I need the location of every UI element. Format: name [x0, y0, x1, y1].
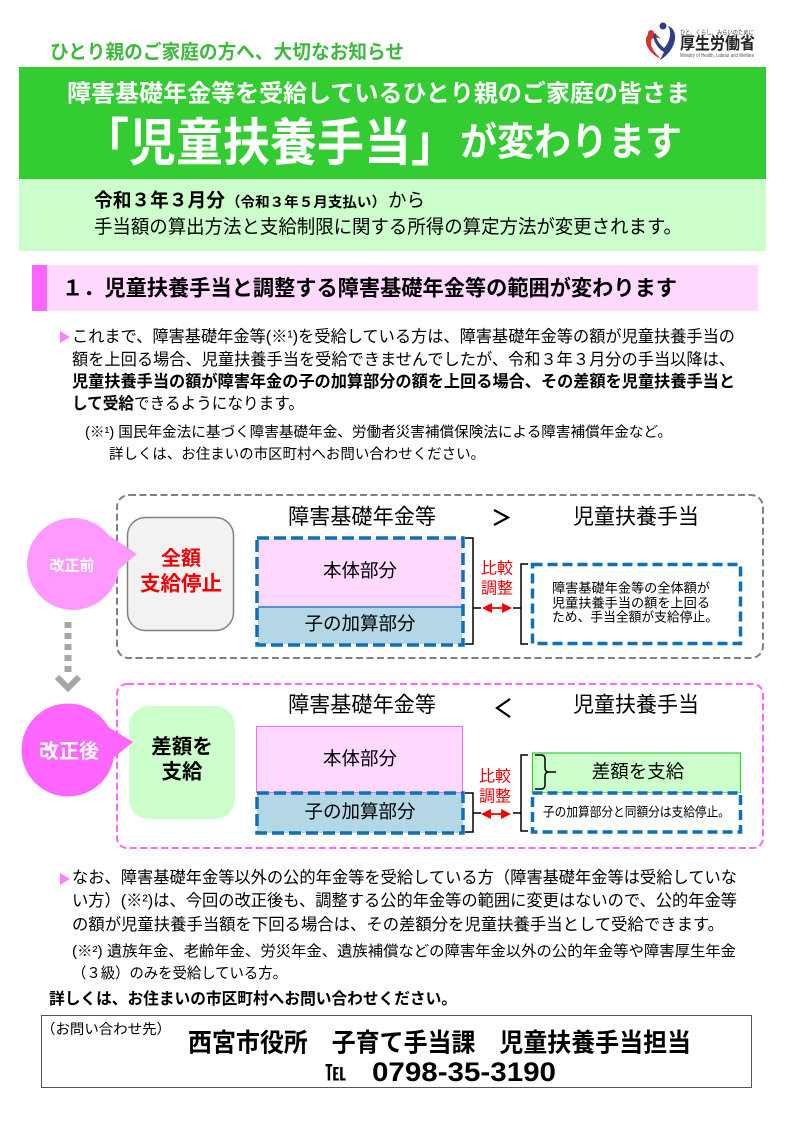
after pension bar — [256, 726, 463, 833]
intro paragraph: して受給できるようになります。 — [72, 394, 304, 413]
before allowance box: 障害基礎年金等の全体額が — [552, 580, 710, 596]
arrow: before to after — [57, 622, 79, 688]
logo: Ministry of Health, Labour and Welfare: Ministry of Health, Labour and Welfare — [680, 53, 754, 59]
before result box: 全額 — [161, 547, 201, 570]
after result box: 差額を — [151, 736, 213, 758]
before badge: 改正前 — [49, 556, 95, 574]
after pension bar: 本体部分 — [323, 748, 397, 769]
after compare label: 調整 — [479, 788, 511, 806]
inquiry note: 詳しくは、お住まいの市区町村へお問い合わせください。 — [49, 989, 457, 1008]
after bracket left — [465, 793, 481, 832]
after badge: 改正後 — [39, 740, 99, 763]
after compare label: 比較 — [479, 768, 511, 786]
footnote 2 — [72, 942, 736, 982]
after stopped box: 子の加算部分と同額分は支給停止。 — [543, 804, 730, 820]
before result box — [128, 518, 234, 630]
before badge — [27, 518, 137, 610]
contact office: 西宮市役所 子育て手当課 児童扶養手当担当 — [188, 1030, 691, 1058]
before bracket right — [513, 564, 528, 644]
payment date: （令和３年５月支払い） — [226, 194, 386, 210]
footnote 2: (※²) 遺族年金、老齢年金、労災年金、遺族補償などの障害年金以外の公的年金等や障害厚生年金 — [72, 942, 736, 960]
before bracket left — [465, 538, 481, 644]
before allowance box: ため、手当全額が支給停止。 — [552, 610, 718, 624]
footnote 1: (※¹) 国民年金法に基づく障害基礎年金、労働者災害補償保険法による障害補償年金など。 — [85, 424, 672, 441]
after badge — [22, 704, 133, 796]
before compare arrow — [484, 604, 510, 612]
after left heading: 障害基礎年金等 — [288, 693, 436, 717]
before left heading: 障害基礎年金等 — [288, 505, 436, 529]
before pension bar: 本体部分 — [323, 560, 397, 581]
second paragraph: なお、障害基礎年金等以外の公的年金等を受給している方（障害基礎年金等は受給していな — [72, 868, 737, 887]
intro paragraph: 額を上回る場合、児童扶養手当を受給できませんでしたが、令和３年３月分の手当以降は、 — [72, 350, 735, 369]
footnote 1: 詳しくは、お住まいの市区町村へお問い合わせください。 — [109, 446, 485, 463]
before allowance box — [532, 564, 740, 644]
second paragraph: い方）(※²)は、今回の改正後も、調整する公的年金等の範囲に変更はないので、公的年金等 — [72, 891, 737, 910]
logo: Ministry of Health, Labour and Welfare: 厚生労働省 — [680, 34, 755, 53]
after result box: 支給 — [162, 760, 203, 784]
after compare label — [479, 768, 511, 806]
effective date suffix: から — [388, 190, 425, 212]
intro paragraph — [60, 327, 735, 413]
after bracket right — [513, 755, 528, 831]
before right heading: 児童扶養手当 — [573, 505, 699, 529]
second paragraph — [60, 868, 737, 934]
footnote 2: （３級）のみを受給している方。 — [72, 965, 287, 982]
section heading — [32, 265, 758, 311]
less-than symbol — [497, 699, 510, 717]
before compare label — [481, 560, 513, 598]
after right heading: 児童扶養手当 — [573, 693, 699, 717]
after compare arrow — [483, 810, 509, 818]
effective date panel — [19, 179, 766, 251]
after difference box — [532, 753, 740, 793]
section heading: １．児童扶養手当と調整する障害基礎年金等の範囲が変わります — [62, 276, 677, 300]
top notice heading: ひとり親のご家庭の方へ、大切なお知らせ — [50, 40, 404, 64]
banner main title suffix: が変わります — [460, 122, 682, 164]
second paragraph: の額が児童扶養手当額を下回る場合は、その差額分を児童扶養手当として受給できます。 — [72, 915, 724, 934]
contact box — [41, 1016, 752, 1088]
panel: after revision — [22, 684, 763, 848]
after result box — [129, 706, 235, 819]
before pension bar: 子の加算部分 — [304, 613, 416, 634]
intro paragraph: これまで、障害基礎年金等(※¹)を受給している方は、障害基礎年金等の額が児童扶養手当の — [72, 327, 735, 346]
before result box: 支給停止 — [140, 572, 222, 596]
title banner — [19, 67, 766, 179]
before allowance box: 児童扶養手当の額を上回る — [552, 594, 710, 610]
intro paragraph: 児童扶養手当の額が障害年金の子の加算部分の額を上回る場合、その差額を児童扶養手当と — [72, 371, 735, 391]
after difference box: 差額を支給 — [592, 761, 685, 782]
before pension bar — [257, 538, 463, 645]
contact label: （お問い合わせ先） — [41, 1021, 171, 1037]
telephone number: 0798-35-3190 — [372, 1057, 556, 1087]
after stopped box — [532, 793, 740, 832]
footnote 1 — [85, 424, 672, 463]
change description: 手当額の算出方法と支給制限に関する所得の算定方法が変更されます。 — [94, 216, 682, 238]
banner subtitle: 障害基礎年金等を受給しているひとり親のご家庭の皆さま — [67, 80, 690, 108]
banner main title: 「児童扶養手当」 — [82, 114, 458, 172]
greater-than symbol — [494, 510, 508, 525]
effective date: 令和３年３月分 — [94, 188, 225, 212]
before compare label: 比較 — [481, 560, 513, 578]
after pension bar: 子の加算部分 — [304, 801, 416, 822]
logo: Ministry of Health, Labour and Welfare: ひと、くらし、みらいのために — [680, 28, 754, 36]
before compare label: 調整 — [481, 580, 513, 598]
logo: Ministry of Health, Labour and Welfare — [646, 22, 755, 60]
telephone mark: ℡ — [325, 1060, 346, 1086]
panel: before revision — [27, 495, 763, 658]
